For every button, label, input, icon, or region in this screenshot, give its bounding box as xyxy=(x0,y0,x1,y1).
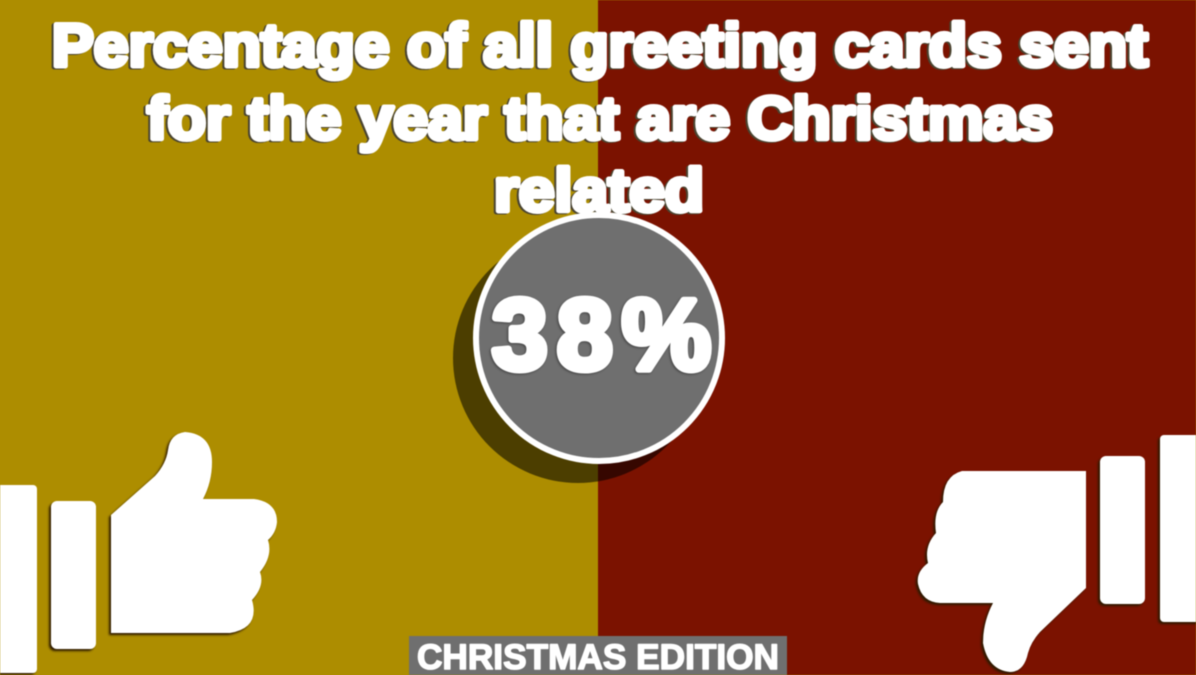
title xyxy=(52,12,1148,224)
stat circle: 38% xyxy=(476,215,722,461)
title: for the year that are Christmas xyxy=(147,85,1053,152)
stat value: 38% xyxy=(492,279,711,391)
panel: gold left background xyxy=(0,0,598,675)
title: related xyxy=(494,157,704,224)
icon: thumbs down xyxy=(918,435,1196,672)
title: Percentage of all greeting cards sent xyxy=(52,12,1148,79)
circle drop shadow xyxy=(453,233,703,483)
icon: thumbs up xyxy=(0,432,277,673)
panel: red right background xyxy=(598,0,1196,675)
